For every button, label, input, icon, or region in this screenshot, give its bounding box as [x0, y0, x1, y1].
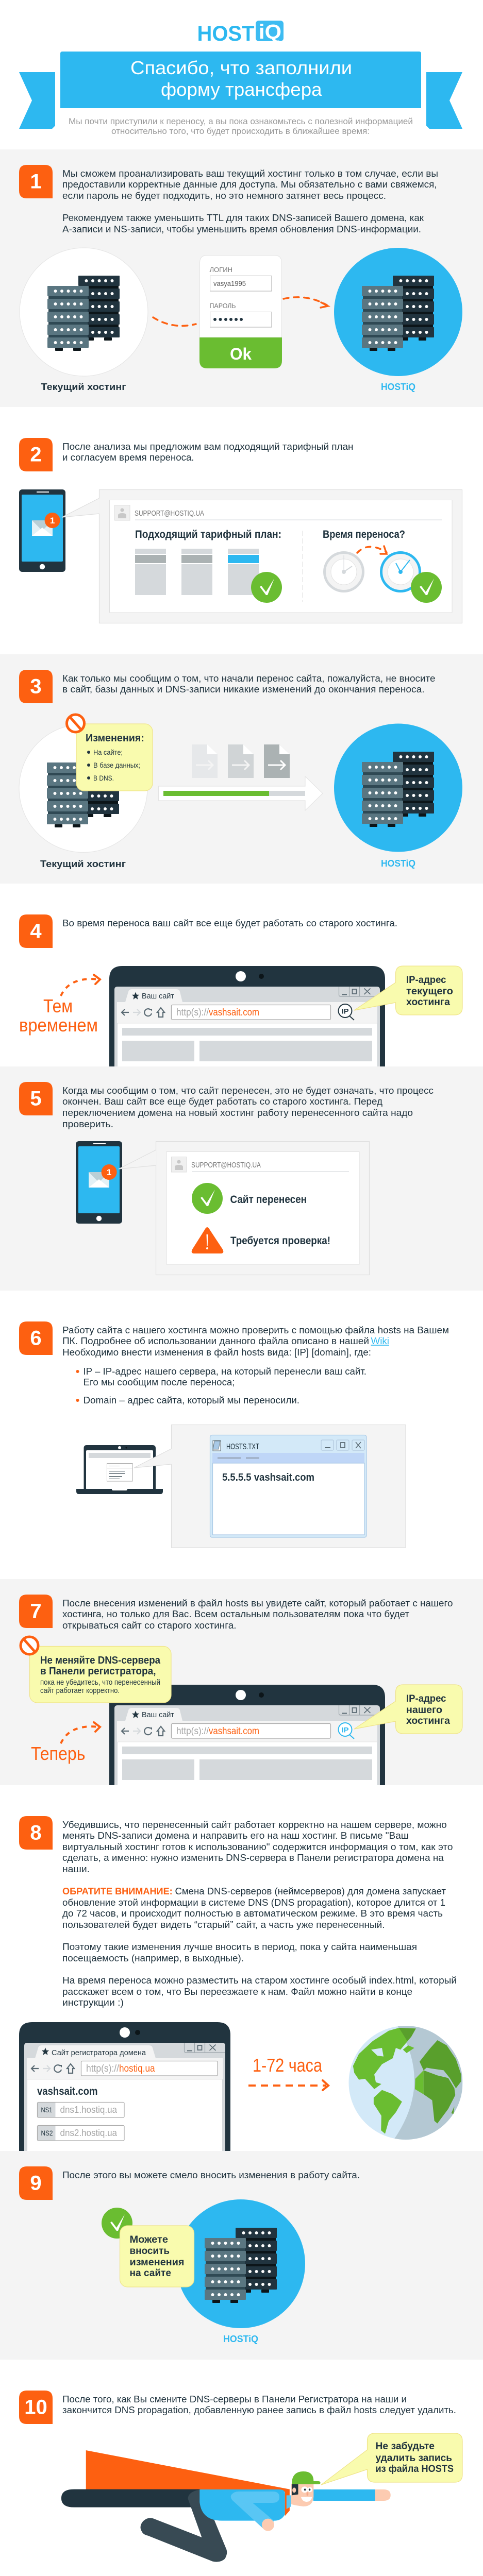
badge 10	[19, 2391, 53, 2424]
bullet list: IP – IP-адрес нашего сервера, на который перенесли ваш сайт.	[84, 1366, 367, 1377]
success note: Можете	[130, 2234, 168, 2245]
browser device: vashsait.com	[209, 1007, 259, 1018]
registrar browser: vashsait.com	[37, 2086, 98, 2097]
ribbon banner	[19, 52, 462, 129]
step 6 text	[62, 1325, 449, 1358]
bullet list: Его мы сообщим после переноса;	[84, 1377, 235, 1387]
badge 6: 6	[30, 1327, 42, 1350]
label: meanwhile: временем	[19, 1014, 98, 1036]
step 8 text: менять DNS-записи домена и направить его на наш хостинг. В письме "Ваш	[62, 1831, 409, 1841]
step 1 text	[62, 168, 438, 234]
step 1 text: Рекомендуем также уменьшить TTL для таких DNS-записей Вашего домена, как	[62, 213, 424, 223]
step 5 text: окончен. Ваш сайт все еще будет работать со старого хостинга. Перед	[62, 1096, 383, 1107]
callout: remove hosts entry: удалить запись	[375, 2453, 452, 2464]
step 3 text: Как только мы сообщим о том, что начали перенос сайта, пожалуйста, не вносите	[62, 673, 435, 684]
badge 1	[19, 165, 53, 198]
step 10 text	[62, 2394, 456, 2415]
step 8 text	[62, 1820, 457, 2008]
login card: vasya1995	[213, 279, 246, 287]
label: current hosting: Текущий хостинг	[41, 382, 126, 392]
phone icon: 1	[50, 516, 55, 526]
tariff plan columns	[135, 549, 282, 603]
step 1 text: предоставили корректные данные для доступа. Мы обязательно с вами свяжемся,	[62, 179, 437, 190]
step 2 text	[62, 442, 354, 463]
label: 1-72 hours: 1-72 часа	[253, 2055, 323, 2076]
callout: current ip	[354, 966, 462, 1015]
callout: current ip: IP-адрес	[406, 975, 446, 986]
no changes note: В базе данных;	[93, 761, 140, 769]
title: форму трансфера	[161, 79, 322, 100]
step 7 text: хостинга, но только для Вас. Всем остальным пользователям пока что будет	[62, 1609, 409, 1619]
step 9 text: После этого вы можете смело вносить изменения в работу сайта.	[62, 2170, 360, 2180]
subtitle: относительно того, что будет происходить в ближайшее время:	[111, 127, 370, 136]
step 5 text: Когда мы сообщим о том, что сайт перенесен, это не будет означать, что процесс	[62, 1086, 434, 1096]
browser device: http(s)://	[176, 1726, 209, 1737]
success note: на сайте	[130, 2268, 171, 2279]
login card: ЛОГИН	[209, 266, 232, 274]
status: transferred: Сайт перенесен	[230, 1194, 307, 1206]
ns2 field	[37, 2126, 124, 2141]
hostiq circle with servers	[176, 2199, 305, 2328]
badge 5: 5	[30, 1087, 42, 1110]
label: meanwhile	[19, 995, 98, 1036]
badge 8: 8	[30, 1822, 42, 1844]
label: now: Теперь	[31, 1743, 86, 1764]
panel: step 1	[0, 149, 483, 407]
hostiq circle with servers	[334, 723, 462, 852]
step 8 text: до 72 часов, и происходит полностью в автоматическом режиме. В это время часть	[62, 1908, 443, 1919]
progress arrow	[159, 776, 323, 810]
step 2 text: и согласуем время переноса.	[62, 452, 194, 463]
ns2 field: dns2.hostiq.ua	[60, 2128, 118, 2138]
step 6 text: Работу сайта с нашего хостинга можно проверить с помощью файла hosts на Вашем	[62, 1325, 449, 1335]
label: current hosting: Текущий хостинг	[40, 859, 126, 869]
panel: step 9	[0, 2151, 483, 2360]
label: hostiq: HOSTiQ	[381, 858, 415, 869]
badge 3: 3	[30, 675, 42, 698]
step 2 text: После анализа мы предложим вам подходящий тарифный план	[62, 442, 354, 452]
ip magnifier	[338, 1723, 354, 1739]
current hosting circle with servers	[19, 724, 147, 852]
panel: step 6	[19, 1321, 449, 1548]
arrow: propagation	[248, 2080, 328, 2090]
panel: step 3	[0, 654, 483, 884]
badge 2	[19, 438, 53, 471]
step 6 text: ПК. Подробнее об использовании данного файла описано в нашей	[62, 1336, 369, 1346]
ip magnifier: IP	[341, 1726, 348, 1734]
success note: вносить	[130, 2246, 170, 2257]
ns1 field: NS1	[41, 2106, 53, 2114]
callout: current ip: хостинга	[406, 997, 450, 1008]
hosts file panel	[134, 1425, 406, 1548]
badge 10: 10	[24, 2396, 47, 2418]
email panel: SUPPORT@HOSTIQ.UA	[135, 509, 204, 518]
title: Спасибо, что заполнили	[130, 57, 352, 78]
browser device: vashsait.com	[209, 1726, 259, 1737]
email panel: Время переноса?	[323, 529, 405, 540]
step 5 text	[62, 1086, 434, 1129]
warning note: сайт работает корректно.	[40, 1687, 120, 1695]
callout: our ip: хостинга	[406, 1716, 450, 1726]
panel: step 4	[19, 914, 462, 1066]
arrow: dashed to login	[153, 317, 196, 326]
badge 5	[19, 1082, 53, 1115]
logo: iQ	[259, 21, 281, 43]
step 1 text: А-записи и NS-записи, чтобы уменьшить время обновления DNS-информации.	[62, 224, 421, 234]
step 7 text: открываться сайт со старого хостинга.	[62, 1620, 236, 1631]
badge 9: 9	[30, 2172, 42, 2195]
login card: Ok	[230, 345, 252, 363]
callout: remove hosts entry: Не забудьте	[375, 2441, 435, 2452]
laptop icon	[76, 1445, 163, 1494]
warning note: Не меняйте DNS-сервера	[40, 1655, 161, 1666]
step 6 text: Необходимо внести изменения в файл hosts вида: [IP] [domain], где:	[62, 1347, 371, 1358]
callout: our ip: IP-адрес	[406, 1693, 446, 1704]
clocks	[325, 546, 442, 603]
step 8 text: пользователей будет видеть “старый” сайт, а часть уже перенесенный.	[62, 1920, 385, 1930]
status: check required: Требуется проверка!	[230, 1235, 330, 1247]
phone icon	[76, 1141, 122, 1224]
panel: step 2	[19, 438, 462, 623]
label: hostiq: HOSTiQ	[223, 2334, 258, 2344]
logo: HOST	[197, 21, 255, 45]
badge 8	[19, 1816, 53, 1850]
arrow: dashed to hostiq	[284, 297, 328, 308]
step 4 text: Во время переноса ваш сайт все еще будет работать со старого хостинга.	[62, 918, 397, 928]
callout: our ip	[354, 1685, 462, 1734]
callout: remove hosts entry	[321, 2433, 462, 2485]
panel: step 8	[19, 1816, 463, 2151]
step 8 text: На время переноса можно разместить на старом хостинге особый index.html, который	[62, 1975, 457, 1986]
status: check required	[192, 1227, 330, 1253]
hosts window	[210, 1435, 367, 1537]
ns1 field	[37, 2102, 124, 2117]
bullet list	[76, 1366, 367, 1405]
subtitle: Мы почти приступили к переносу, а вы пока ознакомьтесь с полезной информацией	[69, 117, 413, 126]
panel: step 5	[0, 1066, 483, 1291]
label: meanwhile: Тем	[43, 995, 73, 1016]
step 8 text: обновление этой информации в системе DNS (DNS propagation), которое длится от 1	[62, 1897, 445, 1908]
badge 7: 7	[30, 1600, 42, 1623]
registrar browser: hostiq.ua	[119, 2063, 155, 2074]
phone icon	[19, 489, 65, 572]
browser device: Ваш сайт	[142, 992, 174, 1001]
bullet list: Domain – адрес сайта, который мы переносили.	[84, 1395, 299, 1405]
status: transferred	[192, 1183, 307, 1214]
no changes note: На сайте;	[93, 748, 123, 756]
subtitle	[69, 117, 413, 136]
callout: remove hosts entry: из файла HOSTS	[375, 2464, 454, 2475]
step 8 text: сделать, а именно: нужно изменить DNS-сервера в Панели регистратора домена на	[62, 1853, 444, 1863]
hosts window: 5.5.5.5 vashsait.com	[222, 1472, 314, 1483]
panel: step 7	[0, 1579, 483, 1785]
email panel	[62, 489, 462, 623]
hosts window: HOSTS.TXT	[226, 1443, 259, 1451]
no changes note	[67, 715, 153, 791]
browser device: http(s)://	[176, 1007, 209, 1018]
step 8 text: наши.	[62, 1864, 90, 1874]
badge 6	[19, 1321, 53, 1355]
title	[130, 57, 352, 100]
hostiq circle with servers	[334, 248, 462, 376]
callout: our ip: нашего	[406, 1705, 442, 1716]
step 8 text: Смена DNS-серверов (неймсерверов) для домена запускает	[175, 1886, 446, 1896]
logo	[197, 21, 284, 45]
ip magnifier	[338, 1004, 354, 1020]
step 3 text: в сайт, базы данных и DNS-записи никакие изменений до окончания переноса.	[62, 684, 425, 694]
badge 2: 2	[30, 443, 42, 466]
badge 3	[19, 670, 53, 703]
email panel	[119, 1142, 369, 1275]
warning note	[21, 1637, 171, 1703]
step 8 text: виртуальный хостинг готов к использованию" содержится информация о том, как это	[62, 1842, 453, 1852]
current hosting circle with servers	[20, 248, 148, 376]
step 10 text: закончится DNS propagation, добавленную ранее запись в файл hosts следует удалить.	[62, 2405, 456, 2415]
step 10 text: После того, как Вы смените DNS-серверы в Панели Регистратора на наши и	[62, 2394, 407, 2404]
registrar browser: http(s)://	[86, 2063, 120, 2074]
badge 7	[19, 1595, 53, 1628]
ip magnifier: IP	[341, 1007, 348, 1015]
browser device	[109, 966, 385, 1066]
step 7 text: После внесения изменений в файл hosts вы увидете сайт, который работает с нашего	[62, 1598, 453, 1608]
ns2 field: NS2	[41, 2129, 53, 2137]
step 6 text: Wiki	[371, 1336, 389, 1346]
file icons	[192, 744, 290, 778]
label: hostiq: HOSTiQ	[381, 382, 415, 392]
step 7 text	[62, 1598, 453, 1631]
warning note: в Панели регистратора,	[40, 1666, 156, 1677]
step 8 text: расскажет всем о том, что Вы переезжаете к нам. Файл можно найти в конце	[62, 1987, 412, 1997]
browser device: Ваш сайт	[142, 1710, 174, 1719]
step 8 text: Убедившись, что перенесенный сайт работает корректно на нашем сервере, можно	[62, 1820, 447, 1830]
ns1 field: dns1.hostiq.ua	[60, 2105, 118, 2115]
email panel: SUPPORT@HOSTIQ.UA	[191, 1161, 261, 1170]
panel: step 10	[19, 2391, 462, 2562]
step 8 text: Поэтому такие изменения лучше вносить в период, пока у сайта наименьшая	[62, 1942, 417, 1952]
registrar browser	[19, 2022, 230, 2151]
phone icon: 1	[107, 1167, 111, 1177]
login card	[199, 256, 282, 368]
step 8 text: инструкции :)	[62, 1997, 124, 2008]
superhero figure	[61, 2450, 391, 2562]
step 5 text: переключением домена на новый хостинг работу перенесенного сайта надо	[62, 1108, 413, 1118]
step 8 text: посещаемость (например, в выходные).	[62, 1953, 244, 1963]
badge 9	[19, 2166, 53, 2200]
badge 1: 1	[30, 170, 42, 193]
arrow: meanwhile	[61, 975, 100, 996]
success note	[102, 2208, 194, 2287]
email panel: Подходящий тарифный план:	[135, 529, 281, 540]
header	[19, 21, 462, 136]
no changes note: В DNS.	[93, 774, 114, 782]
badge 4	[19, 914, 53, 948]
no changes note: Изменения:	[86, 733, 144, 744]
globe	[348, 2026, 463, 2140]
step 3 text	[62, 673, 435, 694]
step 1 text: Мы сможем проанализировать ваш текущий хостинг только в том случае, если вы	[62, 168, 438, 179]
success note: изменения	[130, 2257, 185, 2268]
warning note: пока не убедитесь, что перенесенный	[40, 1679, 160, 1687]
step 1 text: если пароль не будет подходить, но это немного затянет весь процесс.	[62, 191, 386, 201]
badge 4: 4	[30, 920, 42, 943]
step 8 text: ОБРАТИТЕ ВНИМАНИЕ:	[62, 1886, 173, 1896]
step 5 text: проверить.	[62, 1119, 113, 1129]
arrow: now	[61, 1722, 100, 1743]
registrar browser: Сайт регистратора домена	[52, 2048, 146, 2057]
callout: current ip: текущего	[406, 986, 453, 997]
browser device	[109, 1685, 385, 1785]
login card: ПАРОЛЬ	[209, 302, 236, 310]
